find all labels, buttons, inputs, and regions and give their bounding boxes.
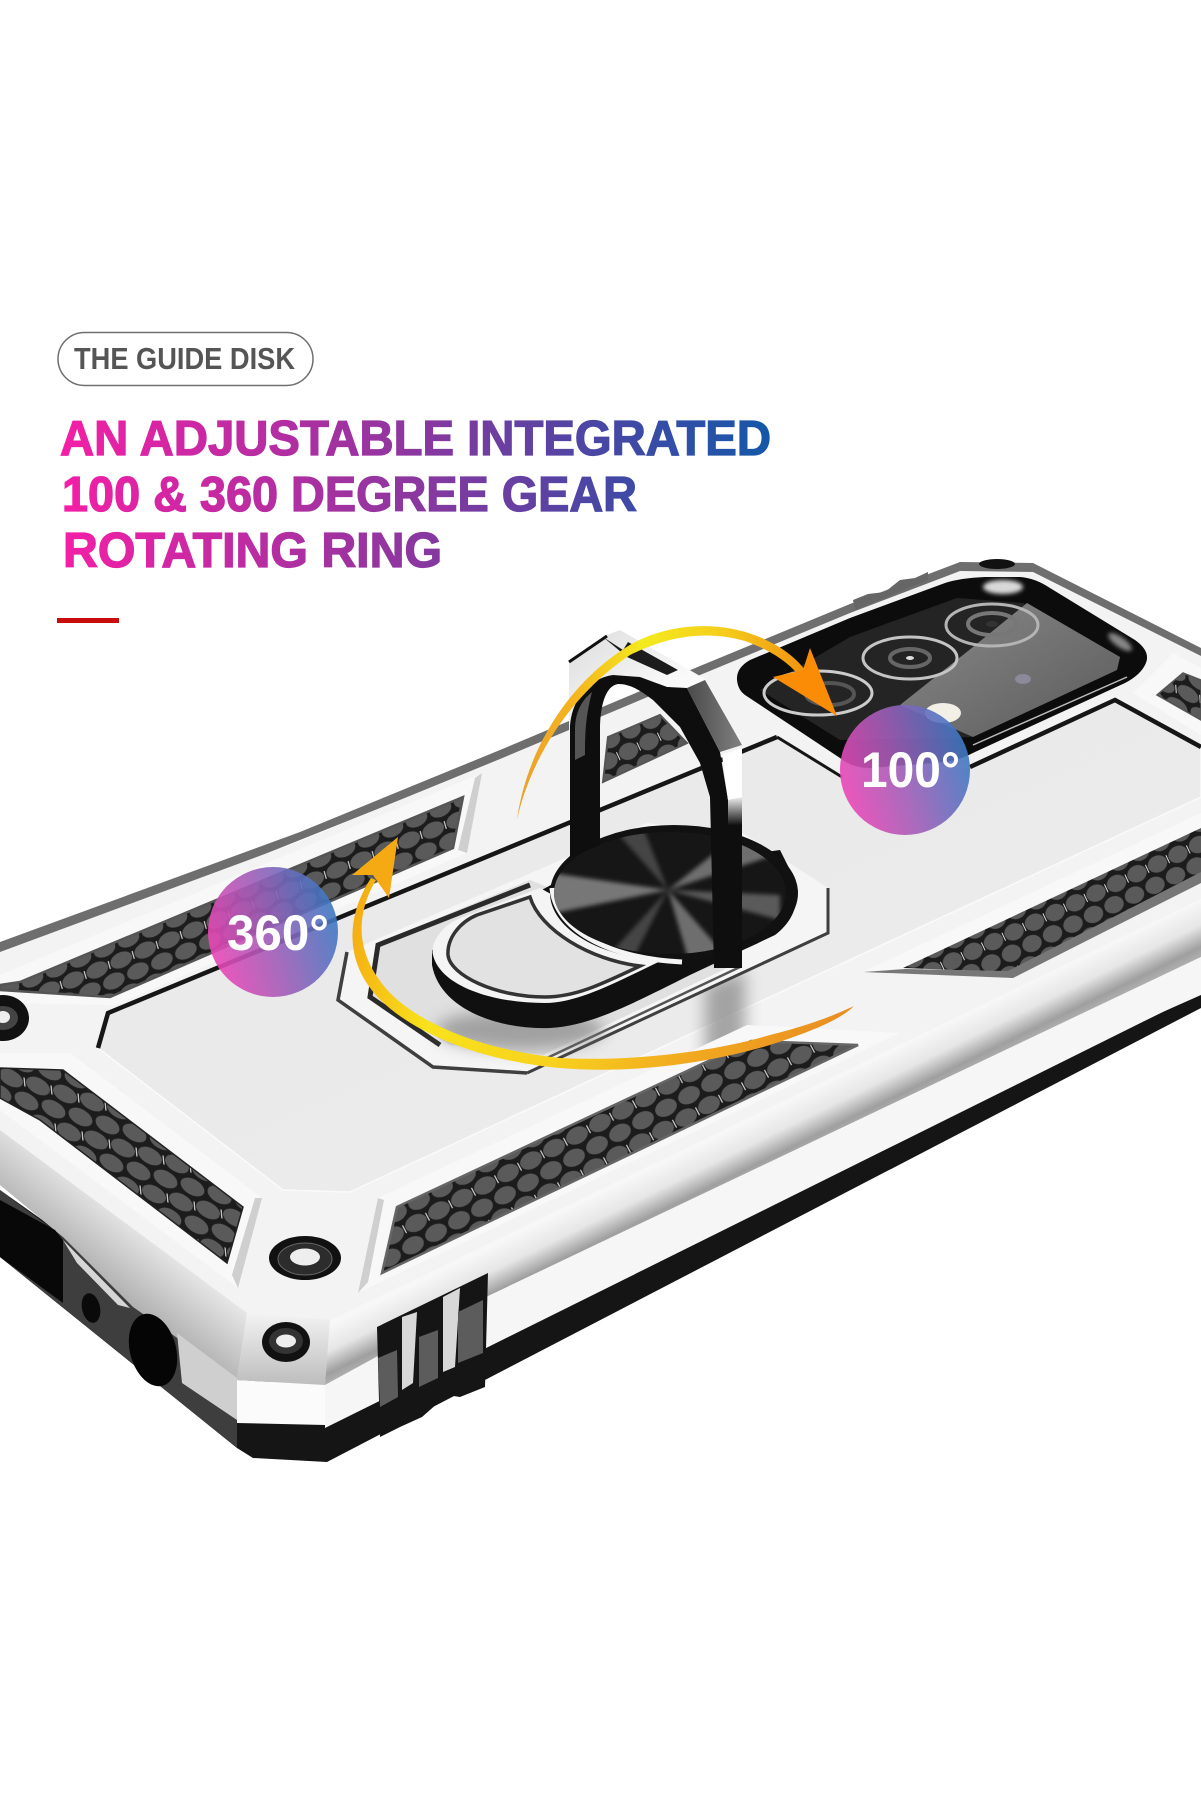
badge: 100 degrees	[840, 705, 970, 835]
title	[60, 412, 771, 578]
microphone dot	[1015, 674, 1031, 684]
arrow: lower rotation arc	[352, 837, 854, 1070]
title: AN ADJUSTABLE INTEGRATED	[60, 412, 771, 466]
camera rim highlights	[983, 580, 1134, 654]
infographic canvas	[0, 332, 1201, 1462]
disc brushed face	[554, 833, 784, 954]
screw corner	[262, 1322, 310, 1362]
lens 2	[863, 637, 957, 679]
camera glass light	[900, 603, 1120, 737]
corner chamfer	[237, 1313, 330, 1385]
honeycomb patch right	[903, 828, 1201, 972]
left side bevel	[0, 1130, 247, 1380]
honeycomb patch right grey edge	[863, 872, 1201, 978]
badge: 100 degrees: 100°	[861, 742, 960, 798]
lens 3	[764, 671, 872, 715]
arch notch	[603, 637, 678, 675]
honeycomb patch lower left	[0, 1068, 243, 1263]
disc rim highlight	[552, 888, 682, 962]
octagon inner recess	[370, 880, 740, 1055]
arrow: upper rotation arc	[517, 626, 837, 820]
side bumper	[377, 1273, 488, 1437]
buttons and top dot	[853, 559, 1015, 610]
screw lower	[269, 1236, 341, 1280]
camera module	[737, 577, 1147, 768]
arch white facet	[722, 748, 742, 800]
patch bevel shaded edges	[232, 773, 482, 1293]
red accent rule	[57, 618, 119, 623]
recess lower line	[547, 967, 740, 1058]
title: ROTATING RING	[63, 524, 442, 578]
patch bevels	[0, 653, 1201, 1293]
rotating ring arch	[569, 630, 742, 968]
honeycomb patch top right	[1157, 673, 1201, 720]
lower side strip	[325, 957, 1201, 1428]
case body	[0, 571, 1201, 1385]
vertical shadow on plate	[705, 970, 745, 1065]
badge: 360 degrees	[208, 867, 338, 997]
arch grey facet	[687, 680, 742, 752]
camera lower rim line	[973, 677, 1127, 745]
pill top rim	[432, 888, 667, 1003]
lower side bevel	[325, 899, 1201, 1385]
title: 100 & 360 DEGREE GEAR	[62, 468, 637, 522]
octagon plate	[338, 823, 828, 1073]
badge: 360 degrees: 360°	[227, 905, 329, 961]
lens 1	[946, 604, 1038, 646]
central plate	[98, 700, 1201, 1192]
recess groove	[370, 885, 530, 1045]
phone case	[0, 559, 1201, 1462]
arch silver top	[569, 630, 707, 735]
ring holder base	[338, 820, 828, 1073]
pill shadow	[435, 1010, 605, 1050]
plate groove lines	[98, 700, 1201, 1048]
tag: the guide disk	[58, 332, 313, 386]
camera outer frame	[737, 577, 1147, 768]
screw left	[0, 995, 29, 1041]
case black base	[0, 990, 1201, 1462]
honeycomb patch upper left	[0, 797, 463, 997]
pill body	[432, 850, 797, 1028]
port strip	[0, 1190, 237, 1448]
flash	[925, 703, 961, 723]
pill top face	[448, 897, 640, 997]
case grey top edge	[0, 562, 1201, 960]
octagon dark edges	[338, 888, 828, 1073]
honeycomb patch lower right	[382, 1041, 858, 1273]
front corner	[237, 1380, 325, 1425]
disc outer	[550, 825, 798, 961]
tag: the guide disk: THE GUIDE DISK	[74, 341, 296, 376]
arch left highlight	[575, 692, 592, 760]
arch top dark edge	[569, 636, 607, 662]
camera glass dark	[760, 598, 1120, 740]
arch leg fade	[728, 797, 742, 825]
honeycomb patch behind ring	[603, 715, 687, 782]
arch black band	[570, 675, 742, 968]
